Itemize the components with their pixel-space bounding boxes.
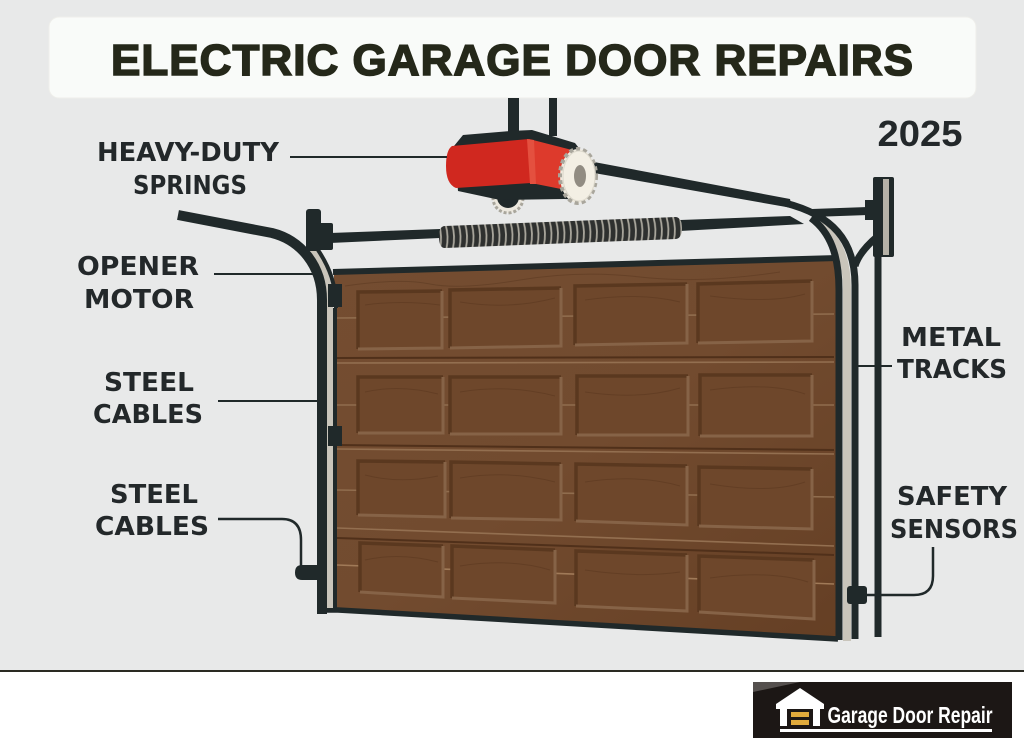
label: opener motor (77, 252, 314, 315)
door panel (334, 258, 838, 638)
garage door (318, 258, 838, 639)
label: metal tracks: TRACKS (897, 355, 1007, 385)
right track (785, 203, 878, 641)
right track bracket (812, 177, 894, 257)
label: steel cables lower: CABLES (95, 512, 209, 542)
heavy-duty spring coil (439, 217, 682, 248)
spring shaft (330, 216, 804, 243)
floor line (0, 670, 1024, 672)
lower gear (493, 183, 523, 213)
door seams (337, 314, 834, 584)
left track (178, 215, 337, 614)
label: heavy-duty springs (97, 138, 447, 201)
logo (753, 682, 1012, 738)
logo house icon (776, 688, 824, 727)
door recessed panels (358, 281, 814, 619)
red body (446, 139, 572, 190)
label: safety sensors: SAFETY (897, 482, 1008, 512)
ceiling mounts (508, 98, 519, 134)
label: safety sensors: SENSORS (890, 515, 1018, 545)
label: steel cables lower (95, 480, 320, 580)
label: metal tracks (858, 323, 1007, 385)
opener belt (594, 162, 792, 208)
label: steel cables upper (93, 368, 320, 430)
door frame top and bottom (333, 258, 838, 272)
left track brackets (306, 209, 342, 446)
title banner: ELECTRIC GARAGE DOOR REPAIRS (111, 36, 913, 85)
label: steel cables upper: STEEL (104, 368, 194, 398)
label: heavy-duty springs: HEAVY-DUTY (97, 138, 280, 168)
motor dark housing (454, 130, 592, 200)
label: metal tracks: METAL (901, 323, 1001, 353)
label: opener motor: MOTOR (84, 285, 194, 315)
title banner (49, 17, 976, 98)
label: safety sensors (847, 482, 1018, 604)
label: steel cables lower: STEEL (110, 480, 198, 510)
label: opener motor: OPENER (77, 252, 199, 282)
year label: 2025 (878, 113, 962, 154)
wood grain (345, 272, 808, 582)
motor gear (560, 149, 596, 203)
label: heavy-duty springs: SPRINGS (133, 171, 247, 201)
label: steel cables upper: CABLES (93, 400, 203, 430)
opener motor (446, 98, 596, 213)
